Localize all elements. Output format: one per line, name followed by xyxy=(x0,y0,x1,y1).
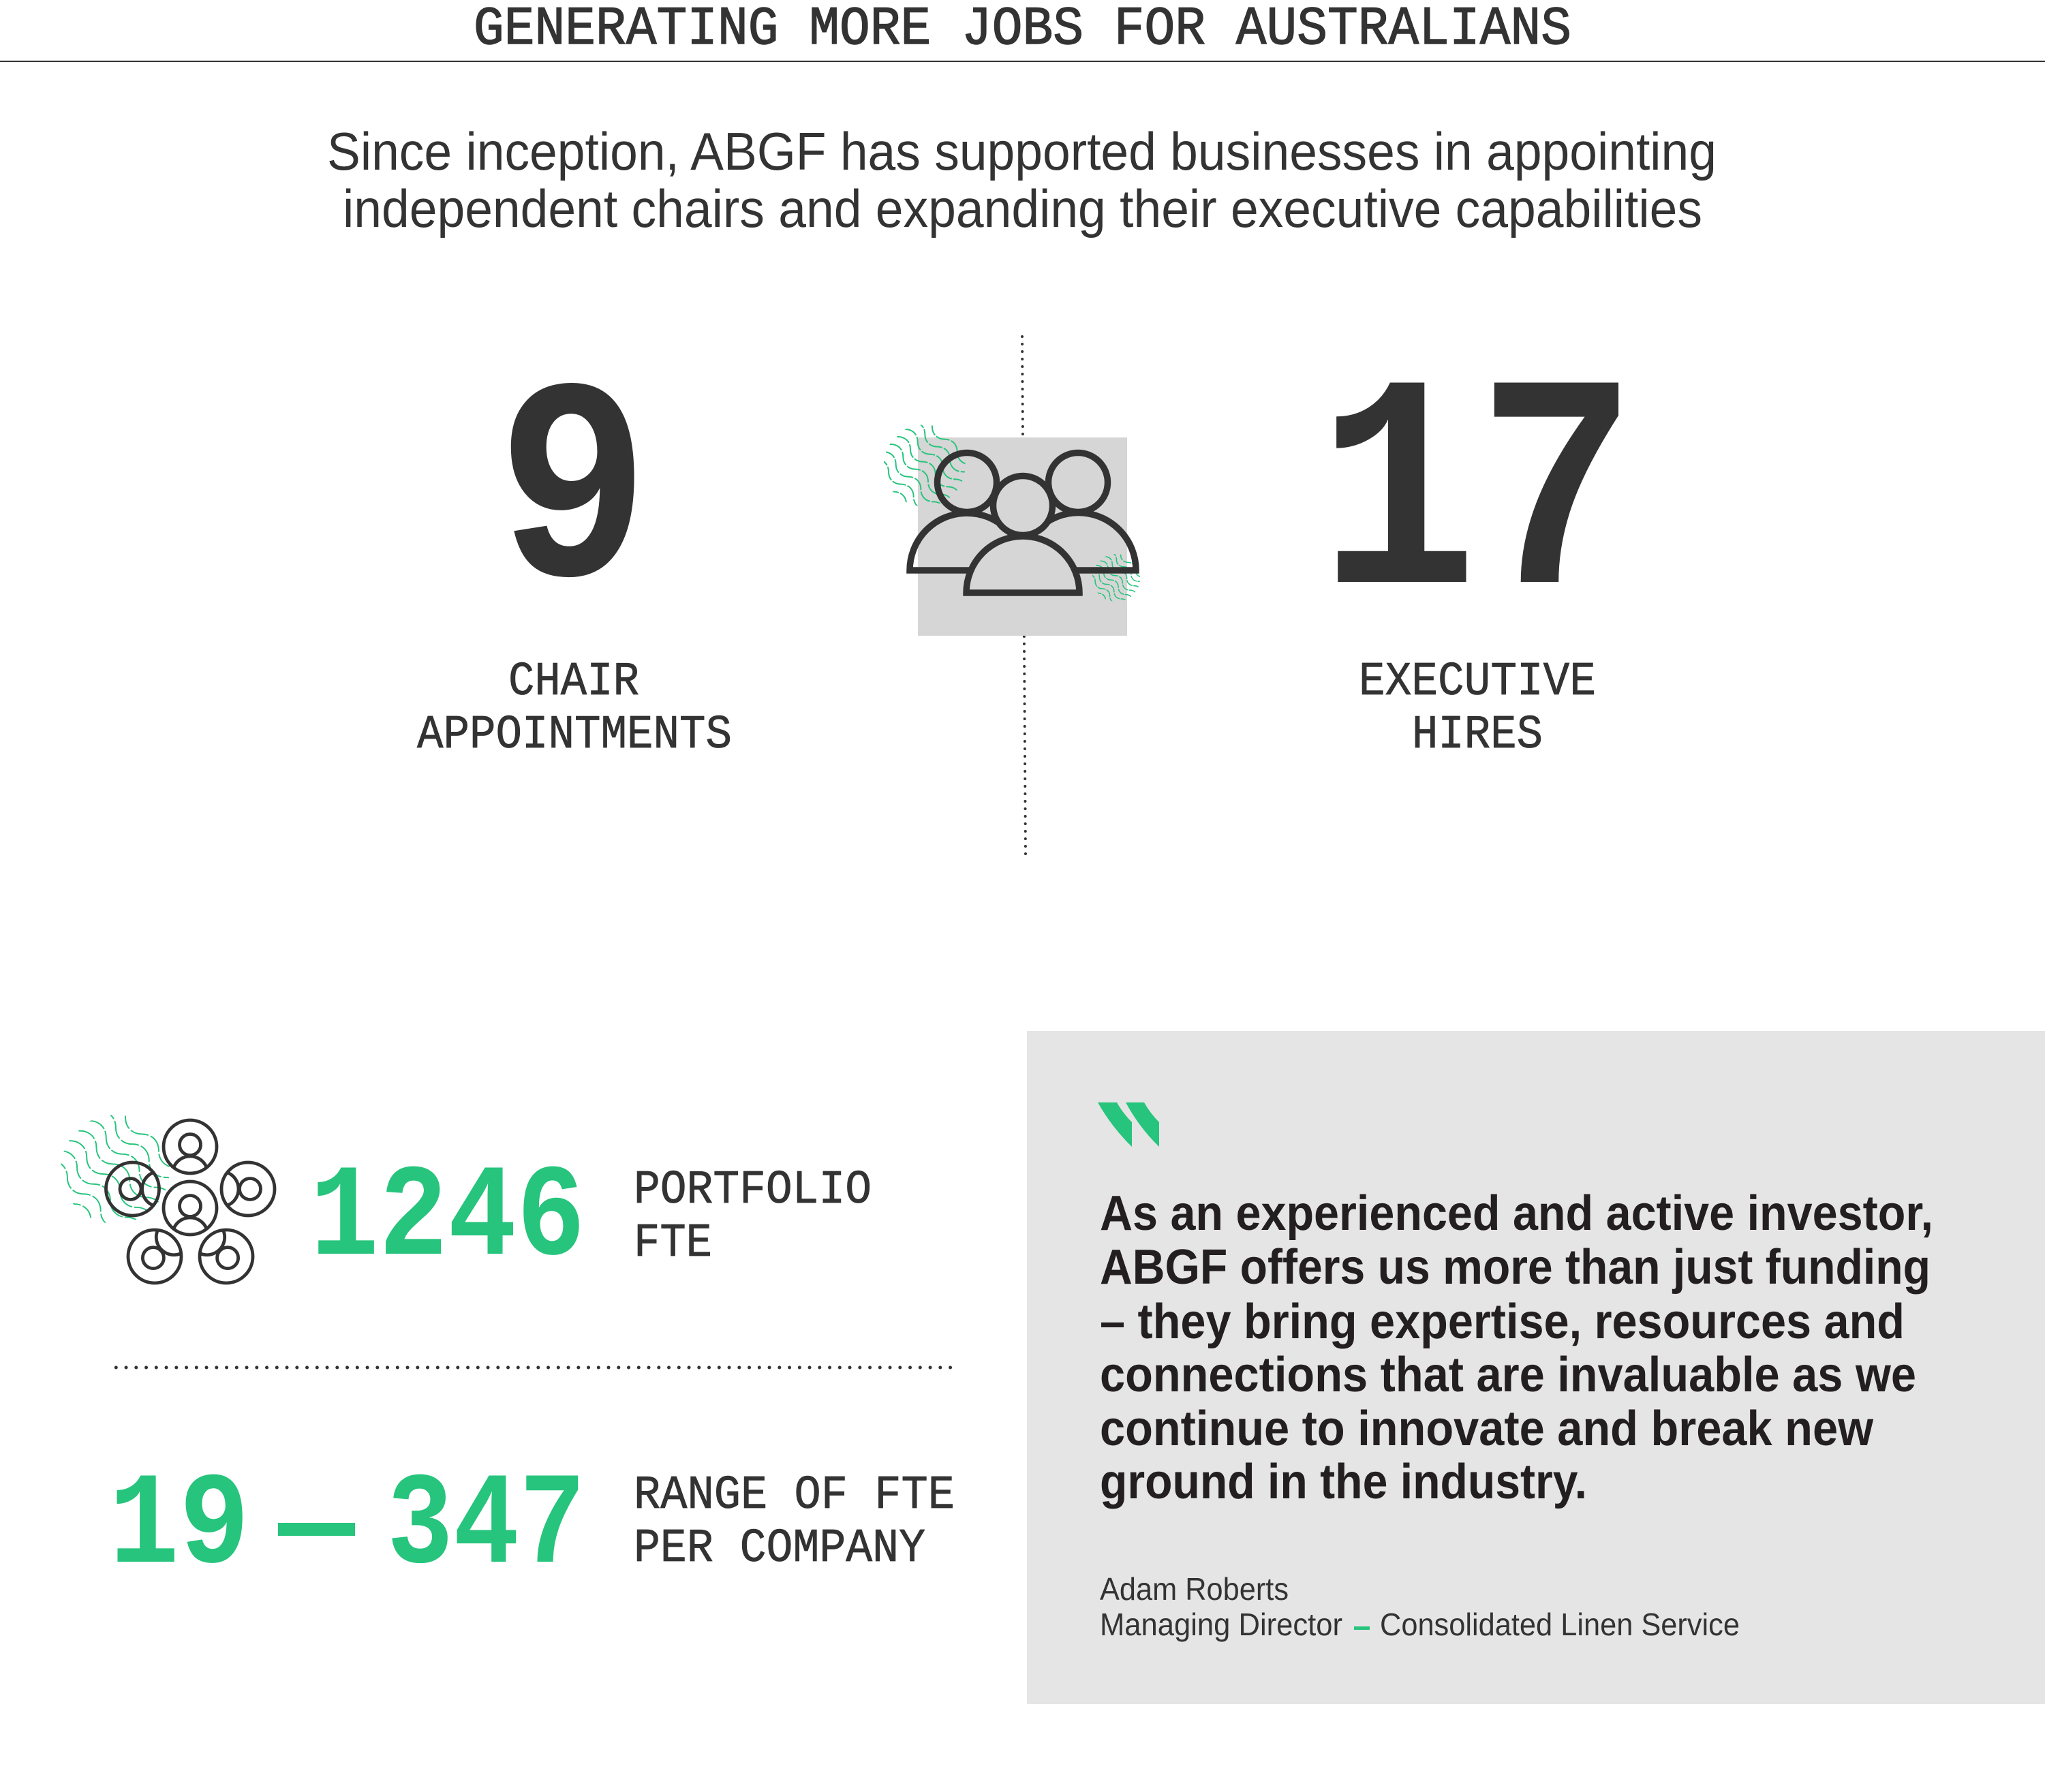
subtitle text: Since inception, ABGF has supported businesses in appointing xyxy=(327,121,1717,181)
quote text: ground in the industry. xyxy=(1100,1455,1587,1509)
panel: testimonial quote xyxy=(1027,1031,2045,1704)
icon: quotation mark xyxy=(1098,1102,1159,1147)
stat: portfolio FTE: 1246 xyxy=(310,1145,585,1293)
stat: executive hires: HIRES xyxy=(1412,709,1543,762)
stat: range of FTE per company: PER COMPANY xyxy=(634,1522,925,1576)
stat: executive hires: EXECUTIVE xyxy=(1359,655,1596,709)
subtitle text xyxy=(327,121,1717,238)
quote text: ABGF offers us more than just funding xyxy=(1100,1240,1931,1295)
stat: chair appointments: 9 xyxy=(497,337,649,661)
stat: chair appointments: APPOINTMENTS xyxy=(417,709,732,762)
stat: portfolio FTE: PORTFOLIO xyxy=(634,1164,872,1218)
title: GENERATING MORE JOBS FOR AUSTRALIANS xyxy=(474,0,1571,61)
stat: range of FTE per company: 347 xyxy=(387,1453,585,1601)
attribution xyxy=(1100,1571,1740,1642)
vertical dotted divider xyxy=(1022,337,1026,856)
horizontal dotted divider xyxy=(116,1365,955,1370)
stat: chair appointments: CHAIR xyxy=(508,655,639,709)
stat: range of FTE per company: RANGE OF FTE xyxy=(634,1469,955,1523)
stat: chair appointments xyxy=(417,337,732,762)
quote text: connections that are invaluable as we xyxy=(1100,1348,1916,1402)
dash between range values xyxy=(278,1523,355,1536)
stat: range of FTE per company xyxy=(109,1453,955,1601)
quote text: – they bring expertise, resources and xyxy=(1100,1295,1905,1349)
icon: group of three people on grey square xyxy=(812,365,1157,636)
stat: range of FTE per company: 19 xyxy=(109,1453,249,1601)
quote text xyxy=(1100,1186,1933,1509)
stat: portfolio FTE: FTE xyxy=(634,1217,712,1271)
stat: portfolio FTE xyxy=(310,1145,872,1293)
stat: executive hires: 17 xyxy=(1319,330,1636,673)
attribution: Consolidated Linen Service xyxy=(1380,1607,1740,1642)
icon: network of six people xyxy=(0,1034,275,1294)
quote text: As an experienced and active investor, xyxy=(1100,1186,1933,1241)
attribution: Managing Director xyxy=(1100,1607,1342,1642)
quote text: continue to innovate and break new xyxy=(1100,1402,1874,1456)
attribution: Adam Roberts xyxy=(1100,1571,1289,1607)
subtitle text: independent chairs and expanding their executive capabilities xyxy=(343,179,1702,238)
